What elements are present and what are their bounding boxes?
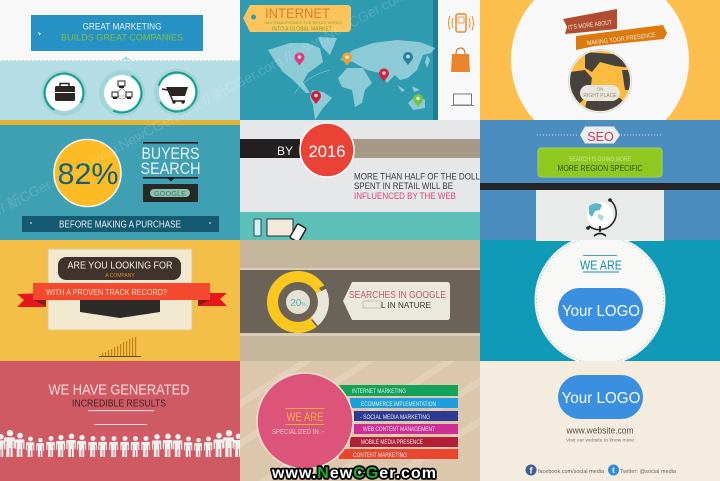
website: www.website.com: [566, 426, 634, 436]
ribbon: making your presence: MAKING YOUR PRESENCE: [587, 32, 656, 47]
pink circle: SPECIALIZED IN :-: [272, 429, 325, 436]
panel: by 2016: [240, 120, 480, 242]
google badge: GOOGLE: [154, 191, 186, 198]
dark hexagon: [80, 300, 160, 318]
globe: [568, 50, 635, 116]
results heading: WE HAVE GENERATED: [48, 382, 190, 398]
statement text: INFLUENCED BY THE WEB: [354, 191, 456, 201]
green box: [538, 148, 662, 177]
seo badge: [580, 126, 620, 144]
panel: contact: [480, 361, 720, 481]
2016 badge: 2016: [308, 142, 346, 161]
google badge: [143, 184, 198, 202]
seo badge: SEO: [587, 130, 614, 144]
website: Visit our website to know more: [566, 438, 634, 442]
statement text: MORE THAN HALF OF THE DOLL: [354, 172, 480, 182]
logo pill: Your LOGO: [562, 303, 640, 320]
statement text: [354, 172, 480, 201]
ribbon: it's more about: IT'S MORE ABOUT: [568, 19, 612, 32]
on right place pill: RIGHT PLACE: [583, 93, 617, 99]
buyers search text: SEARCH: [140, 159, 200, 178]
twitter: t: [612, 466, 615, 475]
logo pill: [558, 288, 643, 331]
82 percent circle: 82%: [58, 158, 118, 191]
buyers search text: [140, 142, 200, 182]
facebook: f: [530, 466, 534, 476]
service bars: MOBILE MEDIA PRESENCE: [361, 440, 423, 446]
searches callout: SEARCHES IN GOOGLE: [349, 290, 446, 301]
buyers search text: BUYERS: [142, 144, 200, 163]
icon: shopping bag: [451, 48, 470, 72]
white seal circle: [534, 234, 666, 366]
website: [566, 426, 634, 442]
green box: SEARCH IS GOING MORE: [569, 157, 631, 163]
green box: MORE REGION SPECIFIC: [558, 164, 643, 173]
icon: ringing phone: [448, 14, 474, 32]
by label: BY: [277, 144, 293, 158]
ribbon: making your presence: [576, 25, 667, 50]
service bars: INTERNET MARKETING: [352, 389, 406, 395]
on right place pill: [580, 85, 620, 101]
twitter: Twitter: @social media: [620, 469, 677, 475]
icon: devices: [254, 219, 306, 242]
service bars: WEB CONTENT MANAGEMENT: [363, 427, 435, 433]
panel: buyers search: [0, 125, 240, 240]
panel: we are logo: [480, 234, 720, 366]
heading banner: BUILDS GREAT COMPANIES: [61, 32, 183, 44]
82 percent circle: [54, 140, 121, 206]
internet tag: INTO A GLOBAL MARKET: [272, 26, 332, 32]
heading banner: [31, 15, 203, 51]
donut chart: 20%: [290, 298, 306, 309]
internet tag: INTERNET: [265, 5, 330, 21]
twitter: [608, 464, 677, 476]
icon: shopping cart: [152, 67, 202, 117]
donut chart: [272, 276, 332, 328]
icon: desk globe: [586, 198, 616, 236]
ribbon: WITH A PROVEN TRACK RECORD?: [46, 287, 167, 297]
ribbon: [17, 283, 227, 307]
dark pill: A COMPANY: [105, 273, 135, 279]
map pins: [294, 52, 423, 107]
dark pill: ARE YOU LOOKING FOR: [68, 260, 173, 272]
icon: briefcase: [37, 66, 91, 120]
2016 badge: [300, 123, 354, 177]
dark pill: [58, 257, 181, 280]
growth bar chart: [99, 337, 141, 357]
internet tag: [243, 5, 351, 32]
bottom banner: BEFORE MAKING A PURCHASE: [59, 220, 181, 230]
results heading: [48, 382, 190, 425]
results heading: INCREDIBLE RESULTS: [72, 398, 166, 410]
icon: network: [95, 66, 149, 120]
statement text: SPENT IN RETAIL WILL BE: [354, 181, 453, 191]
service bars: - SOCIAL MEDIA MARKETING: [360, 415, 430, 421]
world map: [268, 37, 435, 120]
heading banner: GREAT MARKETING: [82, 22, 162, 32]
searches callout: [343, 282, 450, 320]
internet tag: HAS TRANSFORMED THE WHOLE WORLD: [264, 21, 342, 25]
searches callout: L IN NATURE: [381, 300, 431, 310]
service bars: [339, 385, 458, 459]
panel: internet world map: [240, 0, 480, 120]
panel: great marketing: [0, 0, 240, 125]
icon: laptop: [451, 94, 474, 106]
bottom banner: [22, 216, 219, 232]
service bars: CONTENT MARKETING: [353, 453, 407, 459]
pink circle: [257, 373, 353, 469]
panel: are you looking: [0, 240, 240, 361]
card: [48, 249, 192, 330]
facebook: [526, 464, 605, 476]
panel: right place: [480, 0, 720, 120]
on right place pill: ON: [597, 86, 603, 92]
row of people: [0, 430, 243, 457]
panel: specialized in: [240, 361, 480, 481]
panel: incredible results: [0, 361, 243, 481]
logo pill: Your LOGO: [562, 390, 640, 407]
panel: seo: [480, 120, 720, 240]
facebook: facebook.com/social media: [538, 469, 605, 475]
ribbon: it's more about: [563, 9, 617, 34]
logo pill: [558, 375, 643, 419]
panel: searches in google: [240, 240, 480, 361]
we are heading: WE ARE: [580, 258, 622, 272]
service bars: ECOMMERCE IMPLEMENTATION: [361, 402, 436, 408]
pink circle: WE ARE: [286, 412, 324, 424]
